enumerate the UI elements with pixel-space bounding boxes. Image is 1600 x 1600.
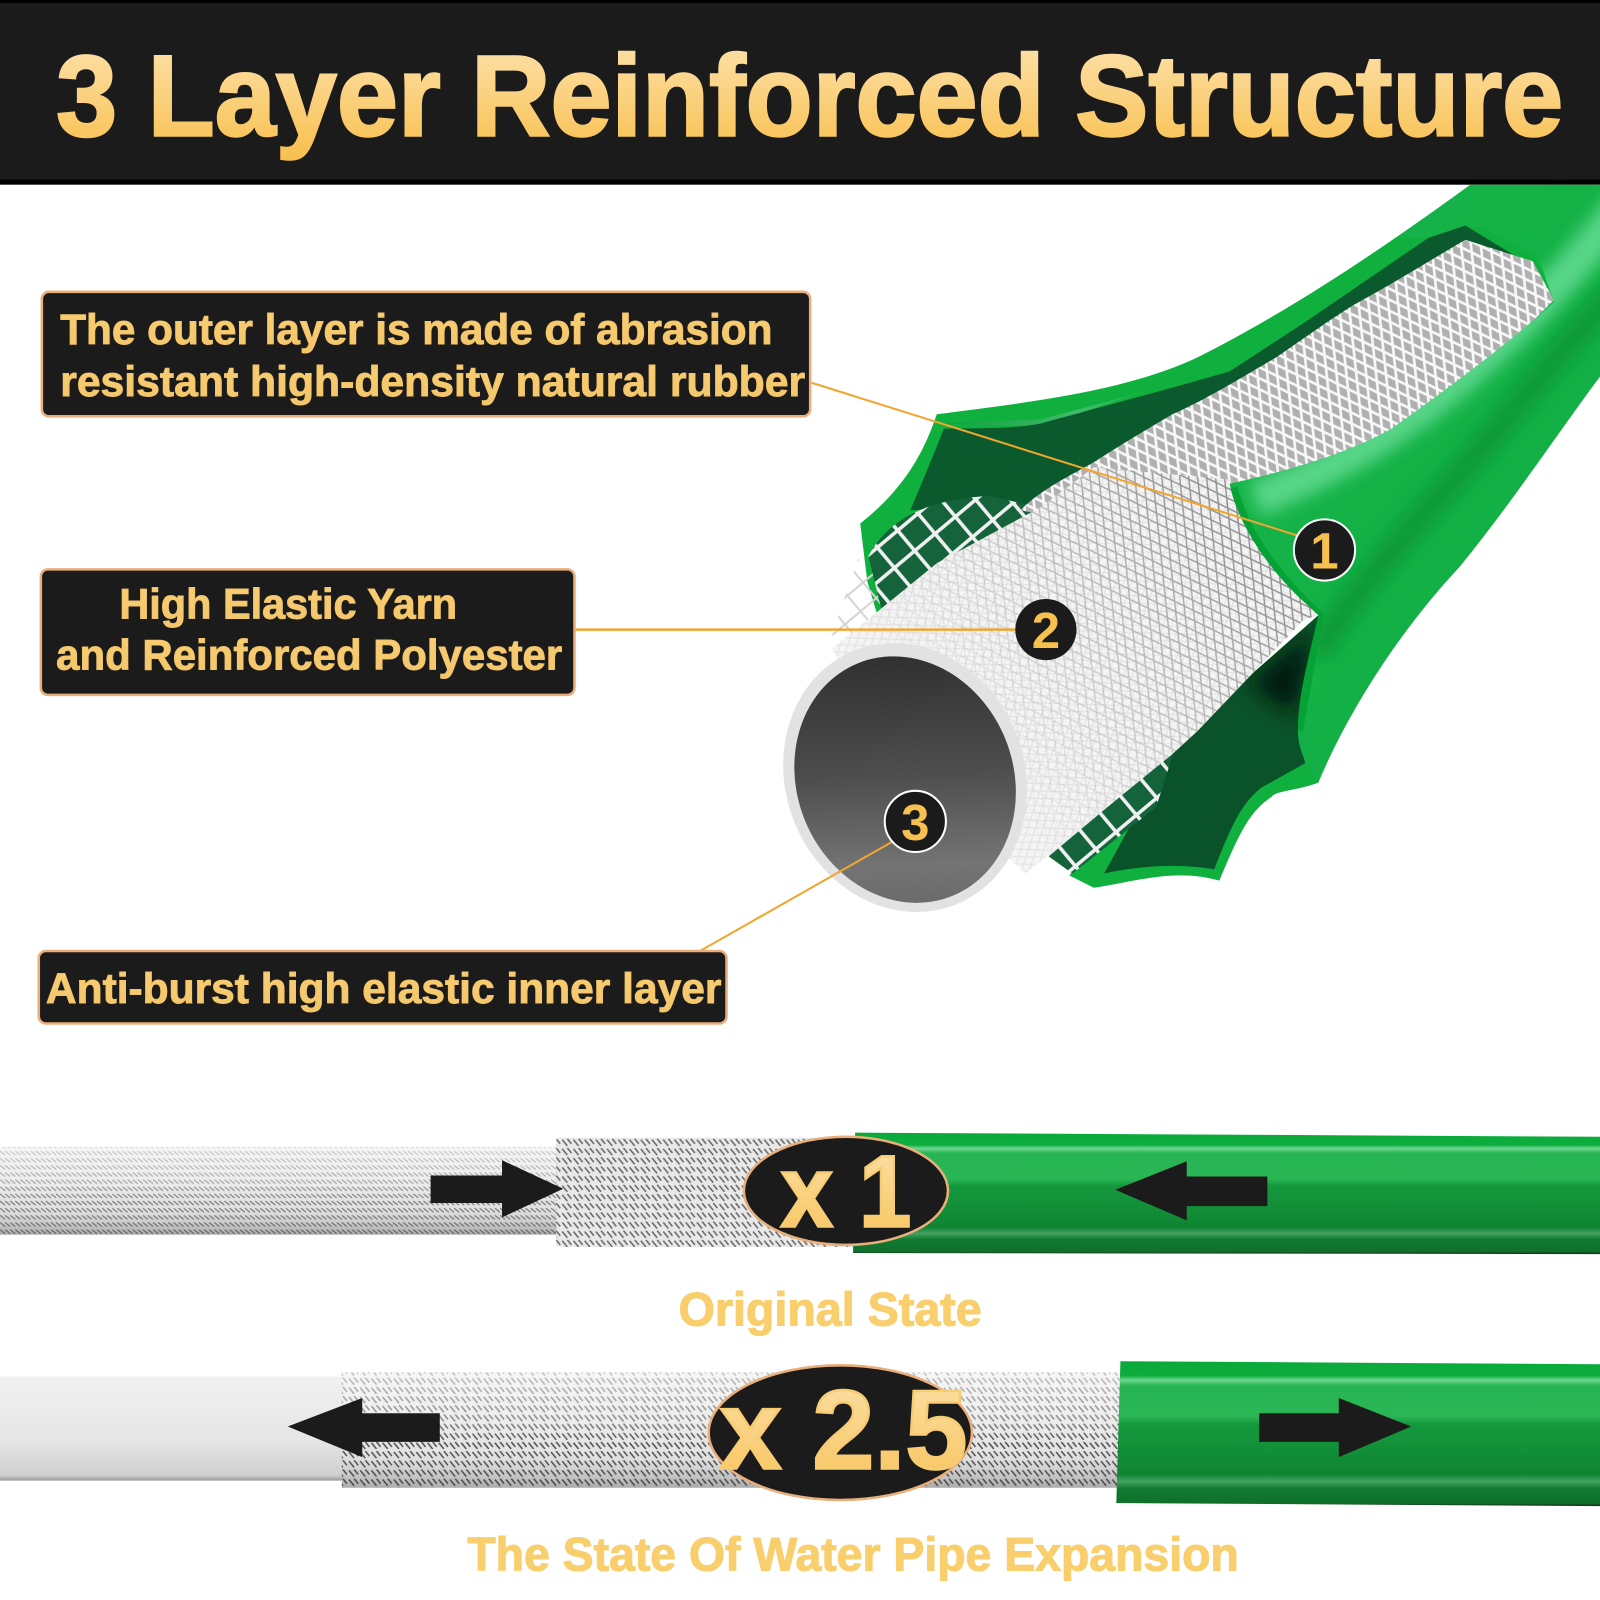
leader line 2 — [574, 628, 1016, 631]
arrow right — [1259, 1398, 1411, 1457]
upper lip highlight — [937, 371, 1219, 427]
leader line 1 — [811, 383, 1298, 536]
original state hose — [0, 1133, 1600, 1254]
callout 1: outer layer: The outer layer is made of abrasion — [60, 306, 772, 354]
callout 3: inner layer — [39, 951, 727, 1023]
callout 1: outer layer — [42, 292, 810, 416]
green outer layer — [853, 1133, 1600, 1254]
callout 2: yarn layer: and Reinforced Polyester — [56, 631, 563, 679]
title: 3 Layer Reinforced Structure — [56, 33, 1563, 161]
callout 3: inner layer: Anti-burst high elastic inner layer — [46, 965, 722, 1013]
marker 2 — [1015, 599, 1077, 660]
hose cutaway illustration — [743, 185, 1600, 949]
badge x1: x 1 — [781, 1135, 911, 1249]
callout 1: outer layer: resistant high-density natural rubber — [60, 358, 805, 406]
dark inner back wall — [910, 226, 1531, 510]
front rubber body — [1214, 185, 1600, 797]
hose open end — [743, 606, 1067, 949]
badge x1 — [744, 1135, 948, 1249]
mesh layer — [342, 1372, 1123, 1488]
marker 3 — [885, 791, 946, 852]
callout 2: yarn layer — [41, 569, 574, 695]
braided mesh tube — [1020, 240, 1554, 531]
flange lower rubber — [1069, 615, 1318, 888]
caption original state: Original State — [679, 1284, 982, 1336]
marker 1: 1 — [1310, 522, 1339, 579]
leader line 3 — [700, 841, 894, 951]
outer rubber back rim — [860, 185, 1600, 622]
caption expansion state: The State Of Water Pipe Expansion — [467, 1528, 1239, 1580]
white inner tube — [0, 1377, 343, 1481]
green outer layer — [1116, 1361, 1600, 1506]
badge x2.5: x 2.5 — [719, 1366, 967, 1492]
marker 1 — [1294, 519, 1355, 581]
arrow left — [1115, 1161, 1267, 1220]
dark inner lower wall — [1104, 616, 1318, 874]
back reinforcing net top — [868, 496, 1052, 618]
arrow left — [288, 1398, 440, 1457]
white yarn-covered tube — [832, 467, 1327, 873]
mesh layer — [556, 1138, 857, 1247]
callout 2: yarn layer: High Elastic Yarn — [119, 580, 457, 628]
arrow right — [431, 1160, 563, 1217]
inner braided tube — [0, 1147, 559, 1235]
marker 2: 2 — [1032, 602, 1060, 659]
expanded state hose — [0, 1361, 1600, 1506]
back reinforcing net bottom — [1047, 740, 1178, 873]
marker 3: 3 — [901, 794, 929, 851]
white net strands at left — [832, 559, 890, 649]
title banner — [0, 0, 1600, 185]
